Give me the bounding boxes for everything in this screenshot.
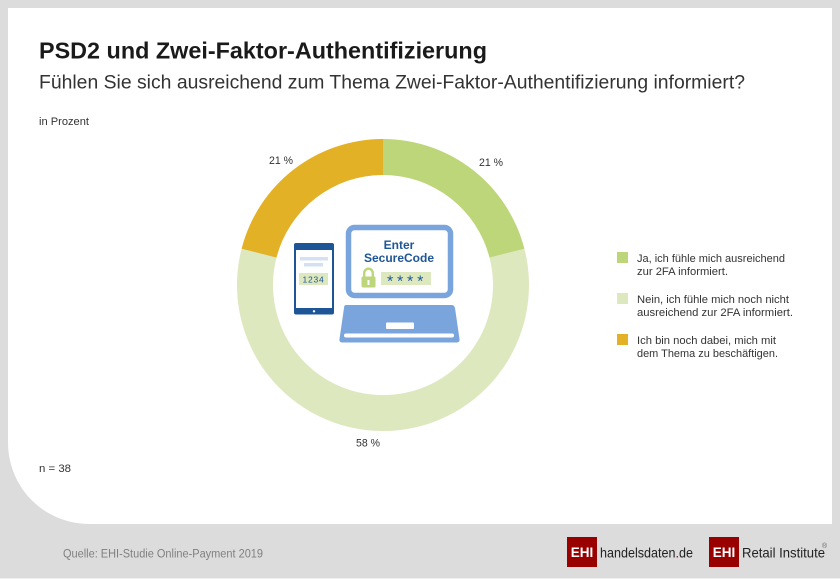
laptop screen: [348, 228, 450, 296]
masked code: ****: [387, 274, 427, 290]
laptop base: [339, 305, 460, 342]
source: Quelle: EHI-Studie Online-Payment 2019: [63, 548, 263, 560]
value label: 21 % green: 21 %: [479, 157, 503, 169]
legend item: Ja: zur 2FA informiert.: [637, 266, 728, 278]
icon: smartphone: [294, 243, 334, 314]
value label: 21 % yellow: 21 %: [269, 155, 293, 167]
segment: Nein 58 %: [237, 249, 529, 431]
icon: padlock: [362, 269, 376, 288]
legend: [617, 252, 793, 360]
logo: EHI Retail Institute: ®: [822, 542, 828, 550]
logo: EHI handelsdaten.de: handelsdaten.de: [600, 544, 693, 560]
legend item: Ich bin noch dabei: [617, 334, 778, 360]
screen heading: Enter: [384, 238, 415, 252]
phone code: 1234: [302, 274, 325, 284]
legend item: Nein: ausreichend zur 2FA informiert.: [637, 307, 793, 319]
legend item: Ja: [617, 252, 785, 278]
logo: EHI Retail Institute: Retail Institute: [742, 544, 825, 560]
screen heading line two: SecureCode: [364, 251, 434, 265]
legend item: Nein: [617, 293, 793, 319]
value label: 58 %: 58 %: [356, 438, 380, 450]
code field: [381, 272, 431, 285]
subtitle: Fühlen Sie sich ausreichend zum Thema Zwei-Faktor-Authentifizierung informiert?: [39, 72, 745, 94]
segment: Ich bin noch dabei 21 %: [242, 139, 383, 258]
unit note: in Prozent: [39, 116, 89, 128]
sample size: n = 38: [39, 463, 71, 475]
logo: EHI handelsdaten.de: [567, 537, 693, 567]
legend item: Ja: Ja, ich fühle mich ausreichend: [637, 253, 785, 265]
logo: EHI Retail Institute: EHI: [713, 545, 735, 560]
logo: EHI handelsdaten.de: EHI: [571, 545, 593, 560]
legend item: Nein: Nein, ich fühle mich noch nicht: [637, 294, 789, 306]
legend item: Ich bin noch dabei: Ich bin noch dabei, mich mit: [637, 335, 776, 347]
title: PSD2 und Zwei-Faktor-Authentifizierung: [39, 38, 487, 64]
logo: EHI Retail Institute: [709, 537, 828, 567]
legend item: Ich bin noch dabei: dem Thema zu beschäftigen.: [637, 348, 778, 360]
icon: laptop: [339, 228, 460, 342]
donut chart: [237, 139, 529, 431]
segment: Ja 21 %: [383, 139, 524, 258]
